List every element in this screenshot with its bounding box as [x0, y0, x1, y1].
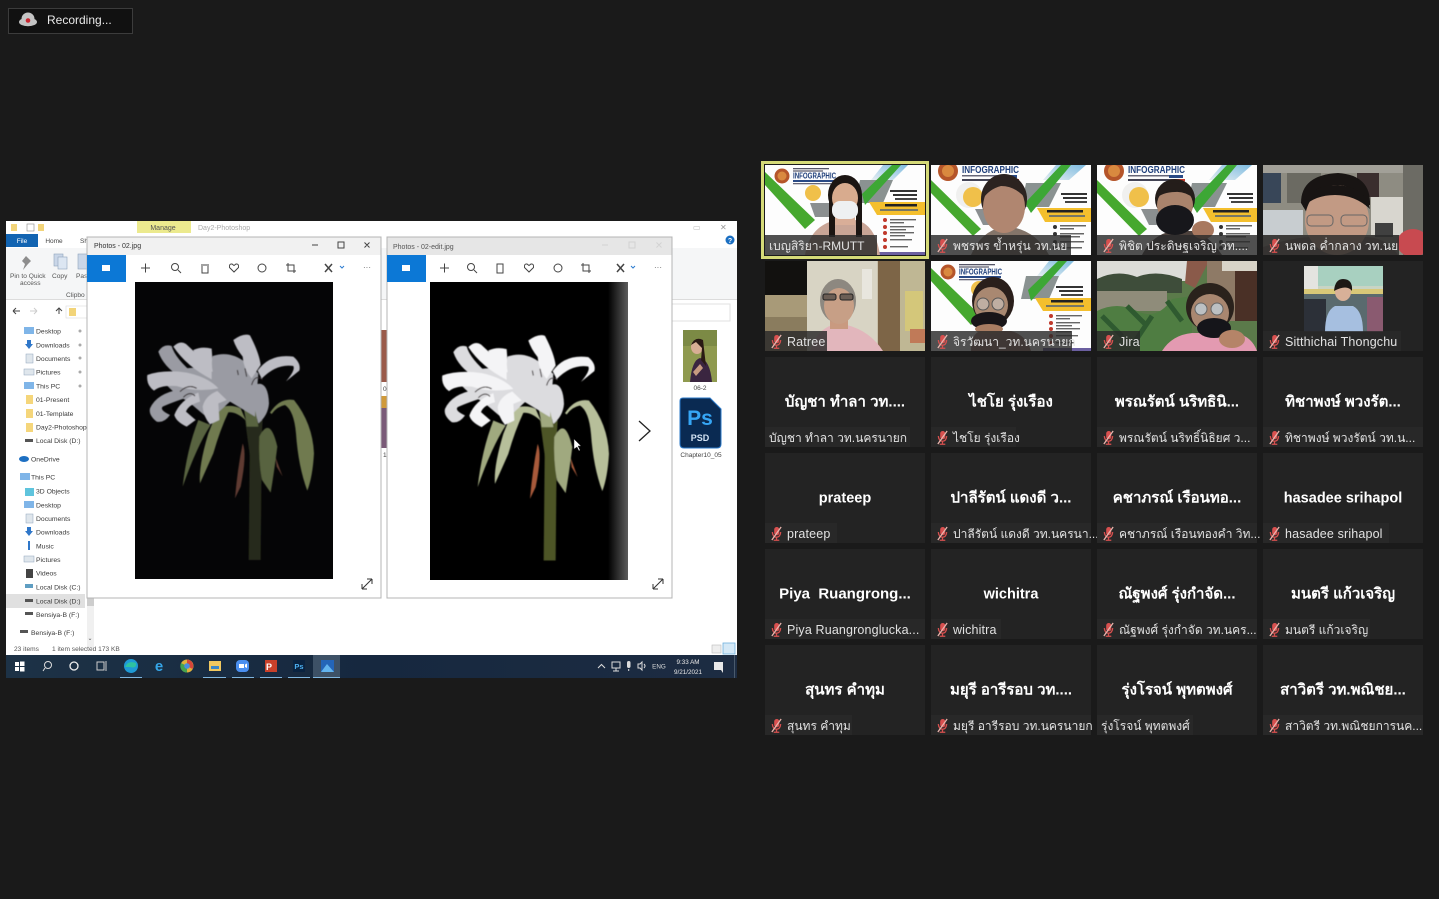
thumbnails behind windows: [381, 330, 387, 459]
navigation tree: Bensiya-B (F:): [36, 612, 79, 619]
tile: พชรพร: พชรพร ข้ำหรุ่น วท.นย: [953, 237, 1067, 254]
shared screen: Windows desktop: [6, 221, 737, 678]
icon: PSD file: PSD: [691, 433, 710, 443]
tile: บัญชา ทำลา: บัญชา ทำลา วท.นครนายก: [769, 431, 907, 445]
window: Photos 02-edit.jpg: [387, 237, 672, 598]
tile: พรณรัตน์: [1097, 357, 1257, 447]
panel: participant gallery: [762, 161, 1429, 735]
ribbon: access: [20, 280, 41, 287]
ribbon: Copy: [52, 273, 68, 280]
profile photo: [1304, 266, 1383, 332]
tile: ทิชาพงษ์: ทิชาพงษ์ พวงรัตน์ วท.น...: [1285, 431, 1415, 445]
navigation tree: Local Disk (D:): [36, 598, 81, 606]
navigation tree: 3D Objects: [36, 488, 70, 496]
file explorer window: [6, 221, 737, 678]
tile: ทิชาพงษ์: [1263, 357, 1423, 447]
navigation tree: Downloads: [36, 342, 70, 350]
tile: สุนทร: สุนทร คำทุม: [805, 682, 885, 700]
ribbon: Pin to Quick: [10, 273, 46, 280]
navigation tree: OneDrive: [31, 456, 60, 464]
navigation tree: Downloads: [36, 530, 70, 536]
photo: original lily: [135, 282, 333, 579]
navigation tree: ⌄: [88, 636, 93, 642]
address bar: [13, 306, 96, 318]
tile: พิชิต: พิชิต ประดิษฐเจริญ วท....: [1119, 239, 1248, 253]
thumbnails behind windows: 1: [383, 452, 387, 459]
tile: มยุรี: มยุรี อารีรอบ วท.นครนายก: [953, 719, 1093, 734]
tile: ปาลีรัตน์: ปาลีรัตน์ แดงดี วท.นครนา...: [953, 527, 1099, 541]
navigation tree: 01-Present: [36, 397, 69, 404]
tile: hasadee srihapol: [1263, 453, 1423, 543]
tile: wichitra: wichitra: [983, 586, 1039, 602]
icon: mouse cursor: [574, 439, 581, 451]
taskbar: P: [266, 662, 272, 672]
tile: Jira: Jira: [1119, 335, 1140, 349]
navigation tree: 01-Template: [36, 411, 74, 418]
tile: hasadee srihapol: hasadee srihapol: [1284, 490, 1402, 506]
tile: นพดล: นพดล ค่ำกลาง วท.นย: [1285, 237, 1398, 253]
navigation tree: This PC: [36, 384, 60, 390]
tile: รุ่งโรจน์: รุ่งโรจน์ พุทตพงศ์: [1101, 719, 1190, 734]
tile: Piya: [765, 549, 925, 639]
photo: edited lily: [430, 282, 628, 580]
thumbnails behind windows: 0: [383, 386, 387, 393]
navigation tree: Documents: [36, 356, 71, 363]
navigation tree: Documents: [36, 516, 71, 523]
explorer title bar: Manage: [150, 225, 176, 232]
tile: wichitra: wichitra: [952, 623, 997, 637]
navigation tree: Desktop: [36, 328, 61, 336]
taskbar: 9:33 AM: [676, 659, 700, 666]
tile: สาวิตรี: สาวิตรี วท.พณิชยการนค...: [1285, 719, 1422, 733]
tile: เบญสิริยา-RMUTT: [765, 165, 925, 255]
navigation tree: [6, 300, 94, 648]
ribbon tabs: [6, 234, 734, 247]
tile: พิชิต: [1097, 161, 1257, 255]
navigation tree: This PC: [31, 474, 55, 482]
tile: พชรพร: [931, 161, 1091, 255]
tile: มยุรี: มยุรี อารีรอบ วท....: [950, 682, 1072, 700]
taskbar: ENG: [652, 664, 666, 670]
thumbnail: 06-2: 06-2: [693, 385, 707, 392]
tile: wichitra: [931, 549, 1091, 639]
tile: Sitthichai: [1263, 261, 1423, 351]
tile: Sitthichai: Sitthichai Thongchu: [1285, 335, 1397, 349]
tile: มนตรี: [1263, 549, 1423, 639]
tile: เบญสิริยา-RMUTT: INFOGRAPHIC: [793, 170, 836, 180]
navigation tree: Bensiya-B (F:): [31, 630, 74, 637]
tile: รุ่งโรจน์: [1097, 645, 1257, 735]
explorer title bar: Day2-Photoshop: [198, 225, 250, 232]
status bar: [14, 643, 735, 654]
explorer title bar: ▭: [693, 223, 701, 232]
explorer title bar: ✕: [720, 223, 727, 232]
tile: คชาภรณ์: คชาภรณ์ เรือนทอ...: [1113, 488, 1241, 506]
tile: มยุรี: [931, 645, 1093, 735]
tile: นพดล: [1263, 165, 1429, 257]
window: Photos 02.jpg: [87, 237, 381, 598]
tile: คชาภรณ์: [1097, 453, 1260, 543]
tile: รุ่งโรจน์: รุ่งโรจน์ พุทตพงศ์: [1122, 680, 1233, 700]
recording indicator: Recording...: [47, 13, 112, 27]
navigation tree: Pictures: [36, 557, 61, 564]
window: Photos 02-edit.jpg: Photos - 02-edit.jpg: [393, 244, 454, 251]
tile: ปาลีรัตน์: ปาลีรัตน์ แดงดี ว...: [951, 488, 1071, 506]
tile: Piya: Piya Ruangronglucka...: [787, 623, 920, 637]
tile: จิรวัฒนา: INFOGRAPHIC: [959, 266, 1002, 276]
tile: สุนทร: [765, 645, 925, 735]
navigation tree: Desktop: [36, 502, 61, 510]
window: Photos 02.jpg: ···: [363, 263, 371, 272]
tile: บัญชา ทำลา: บัญชา ทำลา วท....: [785, 394, 905, 410]
tile: พรณรัตน์: พรณรัตน์ นริทธินิ...: [1115, 392, 1239, 410]
arrow: next photo: [639, 421, 650, 441]
navigation tree: Day2-Photoshop: [36, 424, 87, 432]
ribbon tabs: File: [17, 238, 28, 245]
ribbon tabs: Sh: [80, 238, 88, 245]
taskbar: e: [155, 658, 163, 675]
tile: สาวิตรี: [1263, 645, 1423, 735]
ribbon tabs: Home: [45, 238, 63, 245]
tile: พิชิต: INFOGRAPHIC: [1128, 164, 1185, 176]
tile: พรณรัตน์: พรณรัตน์ นริทธิ์นิธิยศ ว...: [1119, 429, 1250, 445]
tile: สุนทร: สุนทร คำทุม: [787, 719, 851, 734]
tile: ณัฐพงศ์: ณัฐพงศ์ รุ่งกำจัด...: [1118, 584, 1236, 604]
tile: ณัฐพงศ์: [1097, 549, 1257, 639]
ribbon: [6, 248, 737, 300]
ribbon tabs: ?: [728, 238, 732, 245]
tile: hasadee srihapol: hasadee srihapol: [1285, 527, 1383, 541]
tile: Ratree: [765, 261, 925, 351]
status bar: 1 item selected 173 KB: [52, 646, 120, 653]
tile: Ratree: Ratree: [787, 335, 825, 349]
tile: Piya: Piya Ruangrong...: [779, 586, 911, 602]
tile: ไชโย รุ่งเรือง: ไชโย รุ่งเรือง: [952, 431, 1020, 446]
tile: ไชโย รุ่งเรือง: [931, 357, 1091, 447]
tile: prateep: [765, 453, 925, 543]
tile: ณัฐพงศ์: ณัฐพงศ์ รุ่งกำจัด วท.นคร...: [1119, 623, 1257, 638]
taskbar: 9/21/2021: [674, 669, 703, 676]
status bar: 23 items: [14, 646, 40, 653]
tile: สาวิตรี: สาวิตรี วท.พณิชย...: [1280, 680, 1406, 698]
recording indicator: [8, 8, 132, 34]
search box: [672, 304, 730, 321]
tile: บัญชา ทำลา: [765, 357, 925, 447]
ribbon: Past: [76, 273, 89, 280]
tile: พชรพร: INFOGRAPHIC: [962, 164, 1019, 176]
tile: prateep: prateep: [787, 527, 830, 541]
tile: มนตรี: มนตรี แก้วเจริญ: [1291, 584, 1395, 602]
tile: จิรวัฒนา: จิรวัฒนา_วท.นครนายก: [953, 335, 1076, 349]
ribbon: Clipbo: [66, 292, 85, 299]
tile: ไชโย รุ่งเรือง: ไชโย รุ่งเรือง: [967, 392, 1053, 412]
tile: ทิชาพงษ์: ทิชาพงษ์ พวงรัต...: [1285, 392, 1401, 410]
tile: จิรวัฒนา: [931, 261, 1091, 351]
tile: เบญสิริยา-RMUTT: เบญสิริยา-RMUTT: [769, 239, 865, 253]
tile: prateep: prateep: [819, 490, 871, 506]
active speaker highlight: [762, 162, 928, 258]
navigation tree: Pictures: [36, 370, 61, 376]
thumbnail: 06-2: [683, 330, 717, 392]
taskbar: Ps: [294, 662, 304, 671]
tile: มนตรี: มนตรี แก้วเจริญ: [1285, 623, 1368, 637]
tile: คชาภรณ์: คชาภรณ์ เรือนทองคำ วิท...: [1119, 527, 1260, 541]
icon: PSD file: Ps: [687, 407, 713, 430]
taskbar: [6, 655, 737, 678]
tile: ปาลีรัตน์: [931, 453, 1099, 543]
navigation tree: Local Disk (D:): [36, 438, 81, 445]
navigation tree: Local Disk (C:): [36, 584, 81, 592]
navigation tree: Videos: [36, 570, 57, 578]
window: Photos 02.jpg: Photos - 02.jpg: [94, 243, 141, 250]
tile: Jira: [1097, 261, 1257, 351]
icon: PSD file: [680, 398, 722, 459]
icon: PSD file: Chapter10_05: [680, 452, 722, 459]
navigation tree: Music: [36, 544, 54, 550]
window: Photos 02-edit.jpg: ···: [654, 263, 662, 272]
explorer title bar: [11, 221, 727, 233]
